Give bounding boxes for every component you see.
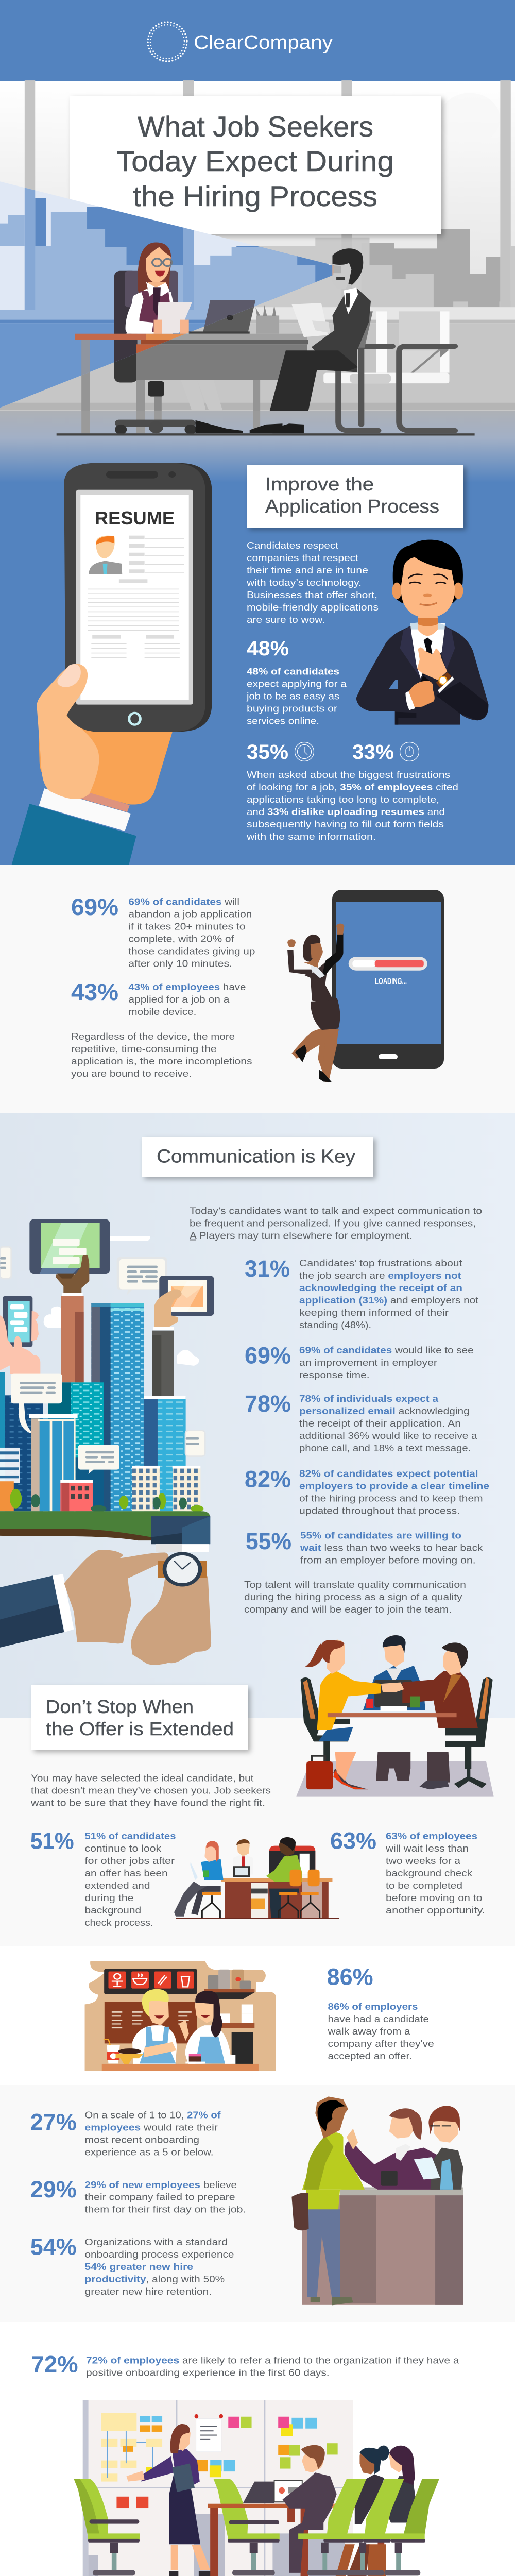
text: top talent: during the hiring process as a sign of a quality — [244, 1591, 462, 1602]
stat: 31%: acknowledging the receipt of an — [299, 1282, 462, 1293]
text: intro: companies that respect — [247, 552, 358, 563]
stat: 35% with clock icon — [247, 741, 314, 764]
stat: 43% mobile: 43% of employees have — [128, 981, 246, 992]
stat: 78%: additional 36% would like to receive a — [299, 1430, 477, 1441]
stat: 54%: Organizations with a standard — [84, 2236, 228, 2247]
stat: 69% abandon: complete, with 20% of — [128, 934, 234, 944]
stat: 43% mobile — [71, 979, 246, 1017]
panel: referrals and closing — [0, 2322, 515, 2576]
section card: improve heading — [247, 465, 464, 528]
text: frustrations: applications taking too long to complete, — [247, 794, 439, 805]
stat: 51%: continue to look — [84, 1843, 162, 1854]
heading: title: What Job Seekers — [138, 110, 373, 143]
stat: 48%: 48% of candidates — [247, 666, 339, 676]
stat: 78%: personalized email acknowledging — [299, 1405, 470, 1416]
stat: 82%: updated throughout that process. — [299, 1505, 460, 1516]
text: intro: with today’s technology. — [246, 577, 362, 588]
stat: 86%: 86% of employers — [328, 2001, 418, 2012]
stat: 82%: of the hiring process and to keep them — [299, 1493, 483, 1504]
stat: 27%: employees would rate their — [84, 2122, 218, 2132]
stat: 55%: from an employer before moving on. — [300, 1555, 476, 1565]
text: resume label: RESUME — [95, 507, 175, 529]
text: intro — [30, 1773, 271, 1808]
stat: 78%: 78% of individuals expect a — [299, 1393, 439, 1404]
section card: improve heading: Application Process — [265, 496, 439, 517]
stat: 51%: for other jobs after — [84, 1855, 175, 1866]
stat: 63%: before moving on to — [386, 1892, 482, 1903]
stat: 86%: accepted an offer. — [328, 2050, 412, 2061]
stat: 31% — [245, 1256, 478, 1330]
stat: 69% abandon: abandon a job application — [128, 909, 252, 920]
text: regardless of device: repetitive, time-consuming the — [71, 1043, 217, 1054]
text: regardless of device: Regardless of the device, the more — [71, 1031, 235, 1042]
text: intro: want to be sure that they have found the right fit. — [30, 1798, 265, 1808]
stat: 31%: keeping them informed of their — [299, 1307, 449, 1318]
stat: 51%: extended and — [84, 1880, 150, 1891]
stat: 48%: expect applying for a — [247, 678, 347, 689]
illustration: businesswoman and loading phone: LOADING... — [375, 976, 407, 986]
panel: onboarding statistics — [0, 2085, 515, 2322]
stat: 43% mobile: applied for a job on a — [128, 994, 230, 1005]
stat: 69% abandon: those candidates giving up — [128, 946, 255, 957]
illustration: hand holding phone with resume — [11, 463, 212, 865]
text: frustrations: subsequently having to fill out form fields — [247, 819, 444, 829]
stat: 29%: 29% — [30, 2176, 77, 2202]
panel: communication is key — [0, 1113, 515, 1718]
stat: 51% — [30, 1828, 176, 1928]
stat: 54% — [30, 2234, 234, 2297]
text: intro: Candidates respect — [247, 540, 338, 551]
stat: 31%: the job search are employers not — [299, 1270, 461, 1281]
heading: title — [116, 110, 394, 212]
stat: 63%: 63% — [330, 1828, 376, 1854]
panel: improve the application process — [0, 463, 515, 865]
stat: 55%: 55% — [246, 1528, 291, 1554]
panel: hero scene, gray half — [0, 80, 515, 483]
stat: 69% response time — [245, 1343, 474, 1380]
stat: 72%: positive onboarding experience in the first 60 days. — [86, 2367, 330, 2378]
stat: 51%: 51% — [30, 1828, 74, 1854]
stat: 27%: 27% — [30, 2109, 77, 2135]
stat: 69% abandon: 69% of candidates will — [128, 896, 239, 907]
stat: 51%: background — [84, 1905, 141, 1916]
text: frustrations: of looking for a job, 35% of employees cited — [247, 782, 458, 792]
stat: 29% — [30, 2176, 246, 2215]
stat: 31%: Candidates’ top frustrations about — [299, 1258, 462, 1268]
text: intro — [246, 540, 379, 625]
stat: 48%: buying products or — [247, 703, 337, 714]
stat: 78% — [245, 1391, 477, 1453]
stat: 63% — [330, 1828, 485, 1916]
section card: communication heading: Communication is Key — [157, 1146, 355, 1167]
illustration: city with hands and devices — [0, 1219, 214, 1665]
stat: 69% abandon: 69% — [71, 894, 118, 920]
stat: 69% response time: response time. — [299, 1369, 370, 1380]
text: frustrations: When asked about the biggest frustrations — [247, 769, 450, 780]
stat: 78%: phone call, and 18% a text message. — [299, 1443, 471, 1453]
stat: 63%: will wait less than — [385, 1843, 469, 1854]
stat: 31%: application (31%) and employers not — [299, 1295, 478, 1306]
stat: 55%: wait less than two weeks to hear back — [300, 1543, 483, 1553]
text: frustrations — [246, 769, 458, 842]
stat: 43% mobile: mobile device. — [128, 1006, 196, 1017]
stat: 82%: 82% of candidates expect potential — [299, 1468, 478, 1479]
stat: 51%: check process. — [84, 1917, 153, 1928]
stat: 82%: employers to provide a clear timeline — [299, 1481, 489, 1492]
stat: 54%: 54% — [30, 2234, 77, 2260]
text: intro: You may have selected the ideal candidate, but — [31, 1773, 253, 1784]
panel: mobile abandonment — [0, 865, 515, 1113]
text: intro: are sure to wow. — [247, 614, 325, 625]
stat: 54%: 54% greater new hire — [84, 2261, 193, 2272]
stat: 51%: during the — [84, 1892, 134, 1903]
text: top talent: Top talent will translate quality communication — [244, 1579, 466, 1590]
stat: 69% abandon — [71, 894, 255, 969]
stat: 86%: 86% — [327, 1964, 373, 1990]
stat: 48%: job to be as easy as — [246, 690, 339, 701]
illustration: new hire at reception desk — [291, 2096, 463, 2306]
stat: 43% mobile: 43% — [71, 979, 118, 1005]
text: regardless of device — [71, 1031, 252, 1079]
illustration: cafe workers — [85, 1961, 276, 2071]
stat: 55%: 55% of candidates are willing to — [300, 1530, 461, 1540]
stat: 86%: company after they've — [328, 2038, 434, 2049]
stat: 35% with clock icon: 35% — [247, 741, 288, 764]
heading: title: the Hiring Process — [133, 180, 377, 212]
section card: don't stop heading: Don’t Stop When — [46, 1696, 194, 1717]
text: intro: A Players may turn elsewhere for employment. — [190, 1230, 413, 1241]
stat: 48%: services online. — [247, 715, 319, 726]
stat: 63%: background check — [386, 1868, 473, 1878]
stat: 48%: 48% — [247, 637, 289, 660]
section card: don't stop heading — [31, 1685, 248, 1750]
stat: 72%: 72% of employees are likely to refer a friend to the organization if they have a — [86, 2355, 459, 2366]
stat: 33% with mouse icon: 33% — [352, 741, 394, 764]
stat: 69% abandon: if it takes 20+ minutes to — [128, 921, 245, 932]
stat: 63%: two weeks for a — [386, 1855, 461, 1866]
illustration: office desk team — [174, 1837, 339, 1919]
stat: 86% — [327, 1964, 434, 2061]
text: top talent — [244, 1579, 466, 1615]
stat: 51%: 51% of candidates — [84, 1831, 176, 1841]
section card: don't stop heading: the Offer is Extended — [46, 1718, 234, 1739]
text: intro: mobile-friendly applications — [247, 602, 379, 613]
stat: 63%: 63% of employees — [386, 1831, 477, 1841]
stat: 33% with mouse icon — [352, 741, 419, 764]
lower city: ground, trees, watch hands — [0, 1481, 211, 1665]
stat: 55% — [246, 1528, 483, 1565]
stat: 86%: walk away from a — [327, 2026, 410, 2037]
stat: 72%: 72% — [31, 2351, 78, 2377]
text: intro: their time and are in tune — [247, 565, 368, 575]
stat: 31%: 31% — [245, 1256, 290, 1282]
text: intro: Today’s candidates want to talk and expect communication to — [190, 1206, 482, 1216]
upper city: towers, arms, tablets — [0, 1219, 214, 1511]
text: frustrations: with the same information. — [246, 831, 376, 842]
stat: 63%: to be completed — [386, 1880, 462, 1891]
text: intro: that doesn’t mean they’ve chosen you. Job seekers — [31, 1785, 271, 1796]
panel: don't stop when the offer is extended — [0, 1635, 515, 1946]
text: regardless of device: application is, the more incompletions — [71, 1056, 252, 1066]
stat: 27%: most recent onboarding — [84, 2134, 199, 2145]
stat: 54%: onboarding process experience — [84, 2249, 234, 2260]
title card — [70, 96, 441, 234]
hero scene, colour wedge — [0, 181, 334, 408]
text: intro: be frequent and personalized. If you give canned responses, — [190, 1218, 476, 1229]
header band — [0, 0, 515, 81]
stat: 31%: standing (48%). — [299, 1319, 371, 1330]
figure: woman cheering — [287, 924, 344, 1082]
stat: 48% — [246, 637, 347, 726]
heading: title: Today Expect During — [116, 145, 394, 177]
stat: 82% — [245, 1466, 489, 1516]
text: regardless of device: you are bound to receive. — [71, 1068, 192, 1079]
stat: 29%: their company failed to prepare — [84, 2192, 235, 2202]
progress bar — [349, 957, 427, 971]
icon: ClearCompany ring logo — [148, 22, 187, 61]
stat: 69% abandon: after only 10 minutes. — [128, 958, 232, 969]
stat: 51%: an offer has been — [84, 1868, 168, 1878]
logo wordmark: ClearCompany — [194, 32, 333, 54]
stat: 78%: 78% — [245, 1391, 291, 1417]
stat: 69% response time: 69% — [245, 1343, 291, 1368]
illustration: businesswoman and loading phone — [287, 890, 444, 1082]
text: intro: Businesses that offer short, — [247, 589, 377, 600]
stat: 86%: have had a candidate — [328, 2013, 429, 2024]
illustration: team meeting at whiteboard — [74, 2400, 451, 2576]
stat: 69% response time: 69% of candidates would like to see — [299, 1345, 474, 1355]
text: frustrations: and 33% dislike uploading resumes and — [247, 806, 445, 817]
stat: 54%: greater new hire retention. — [84, 2286, 212, 2297]
stat: 63%: another opportunity. — [386, 1905, 485, 1916]
text: top talent: company and will be eager to join the team. — [244, 1604, 452, 1615]
stat: 27% — [30, 2109, 221, 2157]
section card: communication heading — [142, 1137, 373, 1177]
stat: 54%: productivity , along with 50% — [84, 2274, 225, 2284]
stat: 72% — [31, 2351, 459, 2378]
illustration: handshake at table — [296, 1635, 494, 1797]
stat: 29%: them for their first day on the job. — [84, 2204, 246, 2215]
stat: 27%: experience as a 5 or below. — [84, 2146, 213, 2157]
illustration: man adjusting watch — [356, 540, 488, 725]
stat: 29%: 29% of new employees believe — [84, 2179, 237, 2190]
panel: candidates walking away — [0, 1946, 515, 2085]
stat: 82%: 82% — [245, 1466, 291, 1493]
text: intro — [190, 1206, 482, 1241]
section card: improve heading: Improve the — [265, 473, 374, 495]
stat: 69% response time: an improvement in employer — [299, 1357, 437, 1368]
stat: 78%: the receipt of their application. An — [299, 1418, 461, 1429]
stat: 27%: On a scale of 1 to 10, 27% of — [84, 2109, 221, 2120]
